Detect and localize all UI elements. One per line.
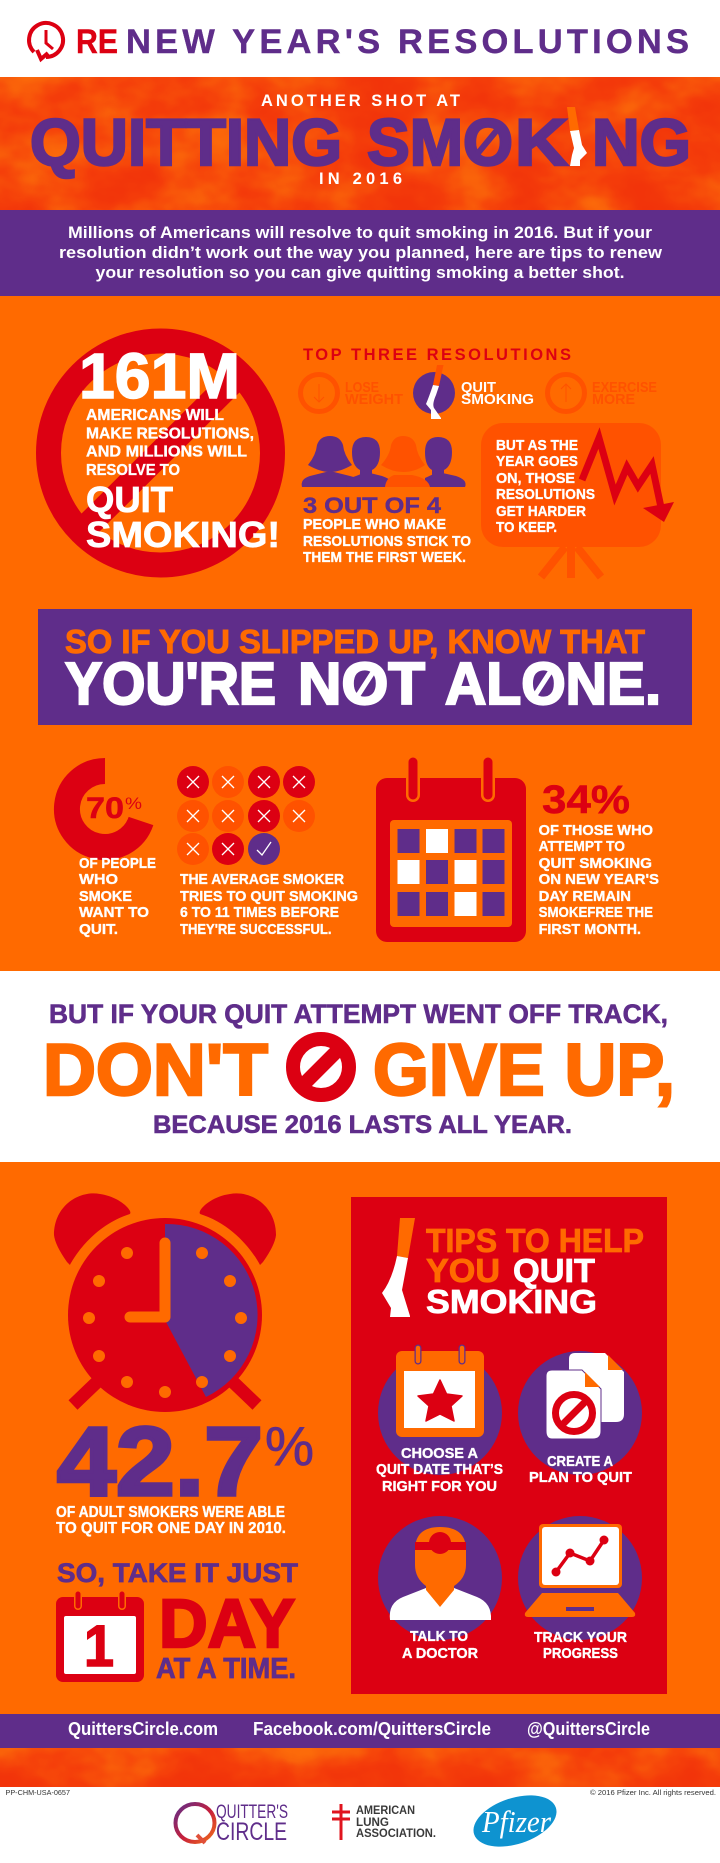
stat: 42.7%: % xyxy=(265,1415,314,1477)
description: SMOKE xyxy=(79,888,132,905)
resolution: lose weight xyxy=(300,374,403,412)
resolution: quit smoking: SMOKING xyxy=(461,391,534,408)
tips heading: YOU xyxy=(426,1252,500,1289)
description: OF PEOPLE xyxy=(79,855,156,872)
description: OF THOSE WHO xyxy=(539,822,653,839)
heading: TOP THREE RESOLUTIONS xyxy=(303,346,571,364)
icon: bent cigarette xyxy=(382,1218,415,1317)
icon grid: attempts xyxy=(177,766,315,865)
description: MAKE RESOLUTIONS, xyxy=(86,426,254,442)
banner line two: ALONE. xyxy=(445,651,661,717)
description: AND MILLIONS WILL xyxy=(86,444,247,461)
tips heading xyxy=(426,1222,644,1320)
orange section two xyxy=(0,1162,720,1714)
intro text: resolution didn’t work out the way you planned, here are tips to renew xyxy=(59,243,663,262)
logo: american lung association: AMERICAN xyxy=(356,1803,415,1817)
footer small print: © 2016 Pfizer Inc. All rights reserved. xyxy=(590,1788,716,1797)
icon: prohibition sign xyxy=(293,1039,349,1095)
panel: chart board xyxy=(481,423,674,578)
stat: 70% xyxy=(86,792,142,825)
description: 6 TO 11 TIMES BEFORE xyxy=(180,904,339,921)
tip: choose a quit date: QUIT DATE THAT’S xyxy=(376,1461,503,1478)
panel: tips to help you quit smoking xyxy=(351,1197,667,1694)
description: QUIT SMOKING xyxy=(539,855,652,872)
board text: GET HARDER xyxy=(496,503,586,520)
kicker: ANOTHER SHOT AT xyxy=(261,92,460,110)
arrow: declining zigzag xyxy=(582,438,674,522)
icon: calendar xyxy=(376,762,526,942)
tip: create a plan xyxy=(518,1351,642,1486)
stat: 70%: 70 xyxy=(86,792,124,825)
description: OF ADULT SMOKERS WERE ABLE xyxy=(56,1504,285,1521)
description: QUIT. xyxy=(79,921,118,938)
year: IN 2016 xyxy=(319,170,402,188)
hero banner: another shot at quitting smoking in 2016 xyxy=(0,77,720,210)
tip: choose a quit date: RIGHT FOR YOU xyxy=(382,1478,497,1495)
description: SMOKEFREE THE xyxy=(539,904,653,921)
hero title: NG xyxy=(592,105,691,179)
intro text xyxy=(59,223,663,282)
board text: TO KEEP. xyxy=(496,519,557,536)
hero title xyxy=(30,105,691,179)
logo: quitter's circle: QUITTER'S xyxy=(216,1802,288,1823)
description xyxy=(79,855,156,938)
banner: you're not alone xyxy=(38,609,692,725)
description: TO QUIT FOR ONE DAY IN 2010. xyxy=(56,1520,286,1537)
icon: prohibition sign xyxy=(48,341,272,565)
board text xyxy=(496,437,595,536)
headline: day at a time: DAY xyxy=(159,1585,295,1662)
description: RESOLVE TO xyxy=(86,462,180,479)
link: facebook: Facebook.com/QuittersCircle xyxy=(253,1719,491,1739)
description: ATTEMPT TO xyxy=(539,838,625,855)
description: THEM THE FIRST WEEK. xyxy=(303,549,466,566)
hero title: K xyxy=(515,105,568,179)
icon: clock with return arrow xyxy=(29,23,63,59)
icon: one-day calendar: 1 xyxy=(84,1614,114,1679)
description: PEOPLE WHO MAKE xyxy=(303,516,446,533)
footer small print: PP-CHM-USA-0657 xyxy=(6,1788,70,1797)
logo: quitter's circle: CIRCLE xyxy=(216,1818,287,1846)
description: AMERICANS WILL xyxy=(86,407,224,424)
description: ON NEW YEAR'S xyxy=(539,871,659,888)
logo: american lung association xyxy=(332,1803,436,1840)
stat: 3 out of 4: 3 OUT OF 4 xyxy=(303,493,442,518)
resolution: lose weight: LOSE xyxy=(345,379,379,396)
description: THE AVERAGE SMOKER xyxy=(180,871,344,888)
board text: BUT AS THE xyxy=(496,437,578,454)
description xyxy=(539,822,659,938)
description xyxy=(56,1504,286,1537)
logo: american lung association: ASSOCIATION. xyxy=(356,1826,436,1840)
tip: track your progress: TRACK YOUR xyxy=(534,1629,627,1646)
tips heading: TIPS TO HELP xyxy=(426,1222,644,1259)
tip: choose a quit date xyxy=(376,1348,503,1495)
panel: top three resolutions xyxy=(300,346,657,419)
title: RE xyxy=(76,23,118,61)
board text: ON, THOSE xyxy=(496,470,575,487)
logo: pfizer xyxy=(467,1786,563,1856)
intro text: Millions of Americans will resolve to quit smoking in 2016. But if your xyxy=(68,223,652,242)
chart: 70 percent donut xyxy=(67,771,141,847)
icon: four people xyxy=(302,436,466,487)
panel: 3 out of 4 xyxy=(302,436,471,566)
intro text: your resolution so you can give quitting smoking a better shot. xyxy=(96,263,624,282)
description: WHO xyxy=(79,871,118,888)
heading: so take it just: SO, TAKE IT JUST xyxy=(57,1558,299,1588)
description xyxy=(180,871,358,938)
banner line two xyxy=(65,651,661,717)
description: THEY'RE SUCCESSFUL. xyxy=(180,921,332,938)
logo: pfizer: Pfizer xyxy=(481,1804,552,1839)
panel: 70 percent xyxy=(67,771,156,938)
description xyxy=(86,407,254,479)
footer small print xyxy=(6,1788,716,1797)
banner line two: NOT xyxy=(298,651,425,717)
stat: 34%: 34% xyxy=(542,778,630,822)
line: 2016 lasts all year: BECAUSE 2016 LASTS ALL YEAR. xyxy=(153,1111,572,1139)
callout: quit smoking: SMOKING! xyxy=(86,514,280,555)
orange section one xyxy=(0,296,720,971)
tips heading: QUIT xyxy=(513,1252,595,1289)
link: twitter: @QuittersCircle xyxy=(527,1719,650,1739)
resolution: quit smoking: QUIT xyxy=(461,379,496,396)
footer links band xyxy=(0,1714,720,1748)
tip: create a plan: CREATE A xyxy=(547,1453,613,1470)
description: TRIES TO QUIT SMOKING xyxy=(180,888,358,905)
description: RESOLUTIONS STICK TO xyxy=(303,533,471,550)
hero title: O xyxy=(463,105,513,179)
hero title: QUITTING xyxy=(30,105,342,179)
tips heading: SMOKING xyxy=(426,1283,597,1320)
icon: alarm clock xyxy=(54,1193,276,1412)
panel: 161M americans xyxy=(48,340,280,565)
banner line two: YOU'RE xyxy=(65,651,276,717)
description: FIRST MONTH. xyxy=(539,921,641,938)
resolution: lose weight: WEIGHT xyxy=(345,391,403,408)
tip: create a plan: PLAN TO QUIT xyxy=(529,1469,632,1486)
tip: choose a quit date: CHOOSE A xyxy=(401,1445,478,1462)
stat 161M: 161M xyxy=(79,340,240,412)
stat: 70%: % xyxy=(125,794,142,813)
board with legs xyxy=(481,423,661,578)
title: NEW YEAR'S RESOLUTIONS xyxy=(126,23,689,61)
headline: day at a time: AT A TIME. xyxy=(156,1653,296,1685)
line: quit attempt off track: BUT IF YOUR QUIT ATTEMPT WENT OFF TRACK, xyxy=(49,999,668,1029)
resolution: exercise more: EXERCISE xyxy=(592,379,657,396)
description: DAY REMAIN xyxy=(539,888,631,905)
stat: 42.7%: 42.7 xyxy=(57,1407,263,1516)
footer fire band xyxy=(0,1748,720,1787)
icon: one-day calendar xyxy=(56,1594,144,1682)
headline words: give up: GIVE UP, xyxy=(373,1030,675,1111)
link: website: QuittersCircle.com xyxy=(68,1719,218,1739)
banner line one: SO IF YOU SLIPPED UP, KNOW THAT xyxy=(65,624,646,661)
resolution: exercise more: MORE xyxy=(592,391,635,408)
callout: quit smoking xyxy=(86,479,280,555)
panel: don't give up xyxy=(43,999,675,1139)
tip: talk to a doctor: TALK TO xyxy=(410,1628,468,1645)
headline word: don't: DON'T xyxy=(43,1030,268,1111)
panel: 34 percent xyxy=(376,762,659,942)
description xyxy=(303,516,471,566)
tip: track your progress: PROGRESS xyxy=(543,1645,618,1662)
board text: YEAR GOES xyxy=(496,453,578,470)
panel: quit attempts xyxy=(177,766,358,938)
intro band xyxy=(0,210,720,296)
tip: talk to a doctor xyxy=(378,1516,502,1662)
board text: RESOLUTIONS xyxy=(496,486,595,503)
header: renew year's resolutions xyxy=(29,23,689,61)
tip: talk to a doctor: A DOCTOR xyxy=(402,1645,478,1662)
tip: track your progress xyxy=(518,1516,642,1662)
callout: quit smoking: QUIT xyxy=(86,479,173,520)
logo: american lung association: LUNG xyxy=(356,1815,389,1829)
resolution: quit smoking xyxy=(413,365,534,419)
resolution: exercise more xyxy=(548,374,657,412)
hero title: SM xyxy=(367,105,463,179)
logo: quitter's circle xyxy=(176,1802,288,1846)
icon: bent cigarette as letter I xyxy=(567,107,587,166)
description: WANT TO xyxy=(79,904,149,921)
